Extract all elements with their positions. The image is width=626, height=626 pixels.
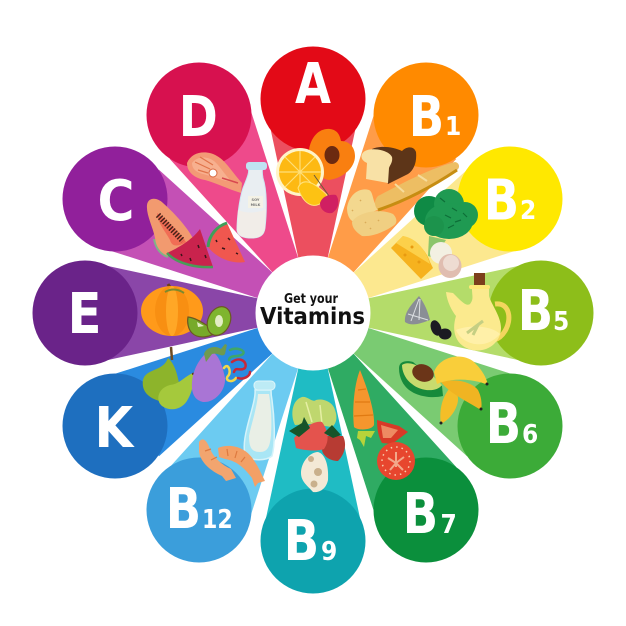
icon: broccoli xyxy=(414,189,478,258)
petal: vitamin C xyxy=(62,146,291,328)
icon: cheese xyxy=(391,236,433,279)
petal: vitamin K xyxy=(62,298,291,478)
label: B1: B xyxy=(409,85,444,150)
icon: apricot xyxy=(309,129,355,180)
icon: tomato slice xyxy=(377,442,415,480)
petal: vitamin B2 xyxy=(335,146,562,328)
label: D: D xyxy=(179,85,218,150)
label: B2 xyxy=(484,168,536,234)
icon: lettuce xyxy=(292,397,336,427)
icon: black seeds xyxy=(429,319,452,340)
icon: soy milk bottle: MILK xyxy=(251,203,261,207)
petal: vitamin B1 xyxy=(298,62,478,291)
label: B5: B xyxy=(518,279,553,344)
label: B5: 5 xyxy=(553,306,569,336)
icon: egg and mushroom xyxy=(430,242,462,278)
petal: vitamin E xyxy=(32,260,261,366)
icon: shrimp xyxy=(199,439,265,487)
icon: pears xyxy=(143,347,203,409)
label: E: E xyxy=(68,282,102,347)
icon: bread loaf xyxy=(361,147,416,184)
heading: Get your Vitamins: Vitamins xyxy=(260,302,365,330)
petal: vitamin B5 xyxy=(365,260,594,366)
petal: vitamin B6 xyxy=(335,298,562,478)
label: B12: B xyxy=(166,477,201,542)
icon: milk bottle xyxy=(244,381,275,460)
label: B12: 12 xyxy=(202,504,233,534)
label: B9: 9 xyxy=(321,536,337,566)
label: B6 xyxy=(486,392,538,457)
label: B7: 7 xyxy=(440,509,457,539)
center circle xyxy=(256,256,370,370)
icon: kiwi xyxy=(188,303,235,339)
icon: oil jug xyxy=(446,273,509,350)
icon: avocado xyxy=(399,361,443,397)
icon: soy milk bottle xyxy=(237,162,267,238)
petal: vitamin B9 xyxy=(260,365,366,594)
label: B6: 6 xyxy=(522,419,538,449)
petal: vitamin A xyxy=(260,46,366,261)
icon: potatoes xyxy=(347,189,396,236)
icon: soy milk bottle: SOY xyxy=(252,198,260,202)
icon: strawberries xyxy=(289,417,345,461)
icon: tomato half xyxy=(377,420,408,444)
icon: watermelon slices xyxy=(167,223,245,267)
label: A: A xyxy=(295,52,331,117)
icon: carrot xyxy=(353,370,375,447)
label: C: C xyxy=(98,168,134,234)
label: B7 xyxy=(403,482,457,547)
label: B2: 2 xyxy=(520,195,536,225)
label: B7: B xyxy=(403,482,438,547)
heading: Get your Vitamins xyxy=(260,291,365,330)
label: B2: B xyxy=(484,168,519,234)
icon: papaya xyxy=(147,199,194,257)
label: B9 xyxy=(284,509,337,574)
petal: vitamin B12 xyxy=(146,335,328,562)
heading: Get your Vitamins: Get your xyxy=(284,291,338,307)
icon: bananas xyxy=(434,357,488,424)
icon: mushrooms xyxy=(301,452,328,492)
icon: pumpkin xyxy=(141,284,203,336)
icon: baguette xyxy=(375,162,459,210)
icon: salmon xyxy=(187,152,242,193)
label: B5 xyxy=(518,279,569,344)
icon: eggplant xyxy=(192,344,227,402)
icon: cherry xyxy=(314,175,338,213)
label: K: K xyxy=(94,396,135,461)
label: B1: 1 xyxy=(445,111,461,141)
label: B12 xyxy=(166,477,233,542)
petal: vitamin B7 xyxy=(298,335,478,562)
label: B6: B xyxy=(486,392,521,457)
icon: peppers xyxy=(224,349,250,381)
icon: lemon slice xyxy=(276,148,327,205)
label: B9: B xyxy=(284,509,319,574)
label: B1 xyxy=(409,85,461,150)
petal: vitamin D xyxy=(146,62,328,291)
icon: sunflower seeds xyxy=(405,296,430,324)
